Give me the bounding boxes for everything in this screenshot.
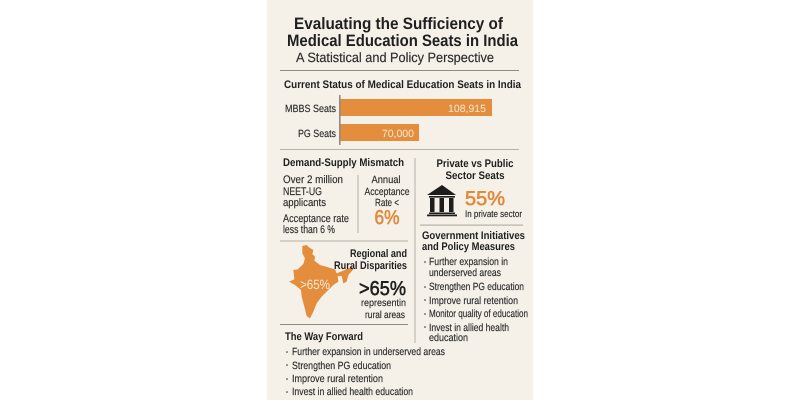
chart heading: Current Status of Medical Education Seats in India bbox=[284, 79, 522, 91]
stat: acceptance rate: 6% bbox=[374, 207, 400, 229]
bullet list: Invest in allied health education bbox=[292, 386, 413, 398]
bullet list: underserved areas bbox=[429, 267, 501, 279]
bullet list: Strengthen PG education bbox=[429, 281, 524, 293]
subtitle: A Statistical and Policy Perspective bbox=[296, 50, 494, 65]
heading: Sector Seats bbox=[446, 170, 504, 182]
bullet list: Improve rural retention bbox=[429, 295, 518, 307]
stat: >65%: >65% bbox=[359, 278, 406, 300]
icon: government building bbox=[427, 185, 457, 216]
bullet list: Monitor quality of education bbox=[429, 308, 528, 320]
bar: MBBS seats: MBBS Seats bbox=[285, 103, 336, 115]
heading: and Policy Measures bbox=[422, 241, 515, 253]
heading bbox=[334, 248, 407, 272]
panel: government initiatives bbox=[422, 230, 528, 344]
text block: applicants: Acceptance rate bbox=[283, 213, 349, 225]
bar: PG seats: PG Seats bbox=[298, 128, 336, 140]
title bbox=[287, 15, 519, 50]
heading bbox=[422, 230, 525, 253]
caption: In private sector bbox=[465, 209, 522, 220]
panel: infographic background bbox=[267, 0, 533, 400]
stat: acceptance rate: Rate < bbox=[375, 197, 399, 209]
caption: representin bbox=[361, 298, 406, 309]
heading: The Way Forward bbox=[285, 331, 363, 343]
bullet list bbox=[424, 256, 528, 344]
text block: applicants bbox=[283, 174, 349, 236]
icon: map of India: >65% bbox=[300, 277, 330, 292]
bullet list: education bbox=[429, 332, 468, 344]
title: Evaluating the Sufficiency of bbox=[294, 15, 503, 33]
caption: rural areas bbox=[365, 310, 405, 321]
panel: private vs public bbox=[427, 158, 522, 220]
bullet list: Improve rural retention bbox=[292, 373, 383, 385]
bar: MBBS seats bbox=[285, 99, 492, 116]
panel: regional and rural disparities bbox=[289, 245, 407, 321]
heading: Rural Disparities bbox=[334, 260, 407, 272]
text block: applicants: applicants bbox=[283, 197, 326, 209]
text block: applicants: NEET-UG bbox=[283, 186, 322, 198]
bar: PG seats: 70,000 bbox=[382, 128, 414, 140]
caption bbox=[361, 298, 406, 321]
heading: Private vs Public bbox=[436, 158, 514, 170]
panel: demand-supply mismatch bbox=[283, 157, 410, 236]
title: Medical Education Seats in India bbox=[287, 32, 519, 50]
bar: PG seats bbox=[298, 124, 419, 141]
bullet list: Further expansion in bbox=[429, 256, 508, 268]
bar: MBBS seats: 108,915 bbox=[448, 103, 486, 115]
bullet list: Strengthen PG education bbox=[292, 360, 391, 372]
heading: Demand-Supply Mismatch bbox=[283, 157, 404, 169]
text block: applicants: less than 6 % bbox=[283, 224, 335, 236]
heading bbox=[436, 158, 514, 182]
bullet list bbox=[286, 346, 445, 398]
stat: 55%: 55% bbox=[465, 188, 505, 210]
heading: Government Initiatives bbox=[422, 230, 525, 242]
text block: applicants: Over 2 million bbox=[283, 174, 343, 186]
panel: the way forward bbox=[285, 331, 445, 398]
panel: current status bar chart bbox=[284, 79, 522, 145]
stat: acceptance rate: Annual bbox=[372, 174, 400, 186]
stat: acceptance rate bbox=[364, 174, 410, 229]
bullet list: Invest in allied health bbox=[429, 322, 509, 334]
stat: acceptance rate: Acceptance bbox=[364, 186, 410, 198]
bullet list: Further expansion in underserved areas bbox=[292, 346, 445, 358]
heading: Regional and bbox=[350, 248, 407, 260]
